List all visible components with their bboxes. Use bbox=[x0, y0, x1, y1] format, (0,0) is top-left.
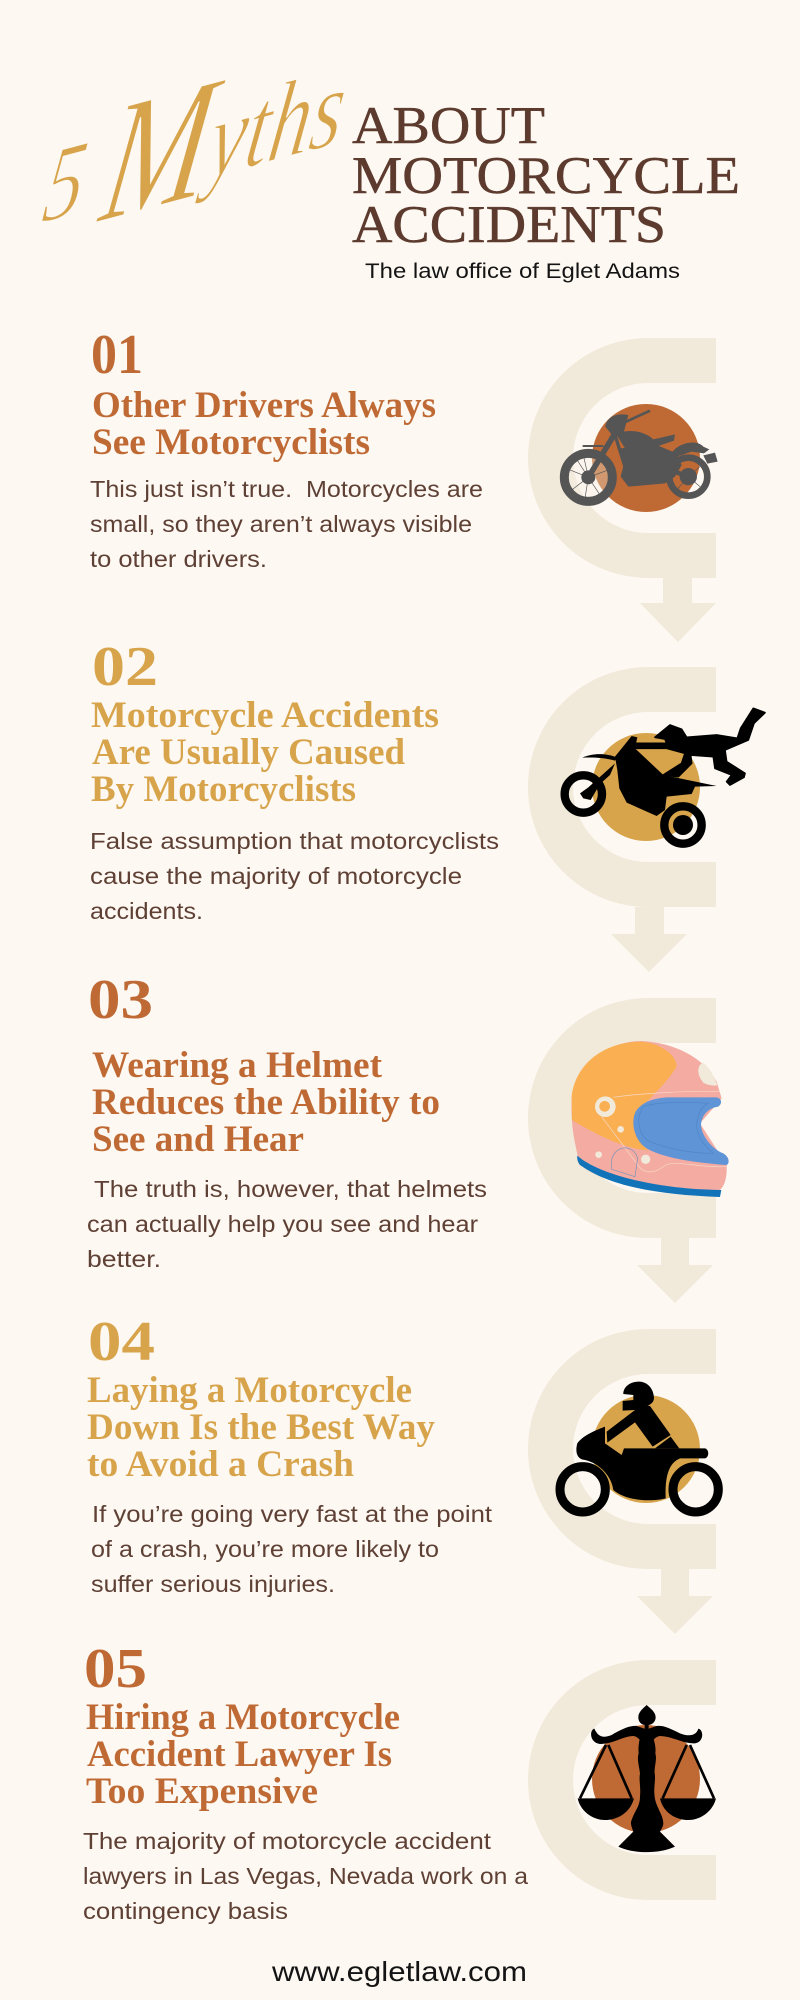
panel: myth 1 text bbox=[90, 324, 483, 572]
heading myth 3: Wearing a Helmet bbox=[92, 1045, 383, 1086]
number 03: 03 bbox=[88, 969, 153, 1031]
heading myth 2 bbox=[91, 695, 439, 810]
heading myth 5: Accident Lawyer Is bbox=[87, 1734, 392, 1775]
icon: stunt rider bbox=[565, 708, 765, 844]
accent circle bbox=[592, 733, 700, 841]
accent circle bbox=[592, 1725, 700, 1833]
number 01: 01 bbox=[91, 324, 143, 386]
body myth 3: better. bbox=[87, 1246, 161, 1272]
heading myth 2: By Motorcyclists bbox=[91, 769, 356, 810]
body myth 4: of a crash, you’re more likely to bbox=[91, 1536, 439, 1562]
number 04: 04 bbox=[88, 1311, 155, 1373]
icon: motorcycle rider bbox=[560, 1382, 718, 1512]
title block bbox=[32, 5, 740, 283]
script heading: 5 Myths: yths bbox=[194, 42, 355, 205]
heading: about motorcycle accidents: ABOUT bbox=[352, 97, 545, 155]
body myth 5 bbox=[83, 1828, 528, 1924]
body myth 5: contingency basis bbox=[83, 1898, 288, 1924]
panel: myth 1 graphic bbox=[551, 360, 718, 642]
body myth 1: This just isn’t true. Motorcycles are bbox=[90, 476, 483, 502]
heading myth 4: Laying a Motorcycle bbox=[87, 1370, 412, 1411]
icon: motorcycle bbox=[564, 411, 718, 501]
arrow shape bbox=[550, 690, 716, 972]
panel: myth 5 text bbox=[83, 1638, 528, 1924]
body myth 2 bbox=[90, 828, 499, 924]
heading myth 5 bbox=[86, 1697, 400, 1812]
panel: myth 5 graphic bbox=[550, 1682, 716, 1878]
panel: myth 3 text bbox=[87, 969, 487, 1272]
arrow shape bbox=[550, 1352, 716, 1634]
heading myth 4 bbox=[87, 1370, 436, 1485]
number 05: 05 bbox=[84, 1638, 147, 1700]
heading myth 2: Are Usually Caused bbox=[92, 732, 405, 773]
body myth 1: small, so they aren’t always visible bbox=[90, 511, 472, 537]
body myth 3: The truth is, however, that helmets bbox=[94, 1176, 487, 1202]
heading: about motorcycle accidents: ACCIDENTS bbox=[352, 196, 666, 254]
body myth 1 bbox=[90, 476, 483, 572]
subtitle: The law office of Eglet Adams bbox=[365, 260, 680, 283]
accent circle bbox=[592, 1395, 700, 1503]
heading myth 3: See and Hear bbox=[92, 1119, 304, 1160]
panel: myth 2 graphic bbox=[550, 690, 765, 972]
body myth 5: The majority of motorcycle accident bbox=[83, 1828, 492, 1854]
accent circle bbox=[592, 404, 700, 512]
heading myth 4: to Avoid a Crash bbox=[87, 1444, 354, 1485]
panel: myth 3 graphic bbox=[550, 1020, 729, 1303]
body myth 4: If you’re going very fast at the point bbox=[92, 1501, 493, 1527]
body myth 1: to other drivers. bbox=[90, 546, 267, 572]
body myth 3: can actually help you see and hear bbox=[87, 1211, 478, 1237]
heading myth 1 bbox=[92, 385, 436, 463]
arch shape bbox=[550, 1682, 716, 1878]
body myth 4 bbox=[91, 1501, 493, 1597]
heading: about motorcycle accidents bbox=[352, 97, 740, 254]
heading myth 3 bbox=[92, 1045, 440, 1160]
heading myth 5: Hiring a Motorcycle bbox=[86, 1697, 400, 1738]
body myth 2: cause the majority of motorcycle bbox=[90, 863, 462, 889]
heading myth 5: Too Expensive bbox=[86, 1771, 318, 1812]
icon: scales of justice bbox=[578, 1705, 716, 1852]
heading myth 4: Down Is the Best Way bbox=[87, 1407, 436, 1448]
heading myth 3: Reduces the Ability to bbox=[92, 1082, 440, 1123]
arrow shape bbox=[551, 360, 716, 642]
body myth 4: suffer serious injuries. bbox=[91, 1571, 335, 1597]
heading myth 2: Motorcycle Accidents bbox=[91, 695, 439, 736]
body myth 3 bbox=[87, 1176, 487, 1272]
footer url: www.egletlaw.com bbox=[271, 1956, 527, 1987]
heading myth 1: See Motorcyclists bbox=[92, 422, 370, 463]
body myth 2: False assumption that motorcyclists bbox=[90, 828, 499, 854]
panel: myth 4 text bbox=[87, 1311, 493, 1597]
number 02: 02 bbox=[92, 636, 158, 698]
heading myth 1: Other Drivers Always bbox=[92, 385, 436, 426]
script heading: 5 Myths: M bbox=[89, 39, 233, 261]
panel: myth 4 graphic bbox=[550, 1352, 718, 1634]
panel: myth 2 text bbox=[90, 636, 499, 924]
script heading: 5 Myths: 5 bbox=[36, 116, 95, 246]
heading: about motorcycle accidents: MOTORCYCLE bbox=[352, 147, 740, 205]
icon: helmet bbox=[571, 1041, 729, 1197]
body myth 2: accidents. bbox=[90, 898, 203, 924]
body myth 5: lawyers in Las Vegas, Nevada work on a bbox=[83, 1863, 528, 1889]
arrow shape bbox=[550, 1020, 716, 1303]
